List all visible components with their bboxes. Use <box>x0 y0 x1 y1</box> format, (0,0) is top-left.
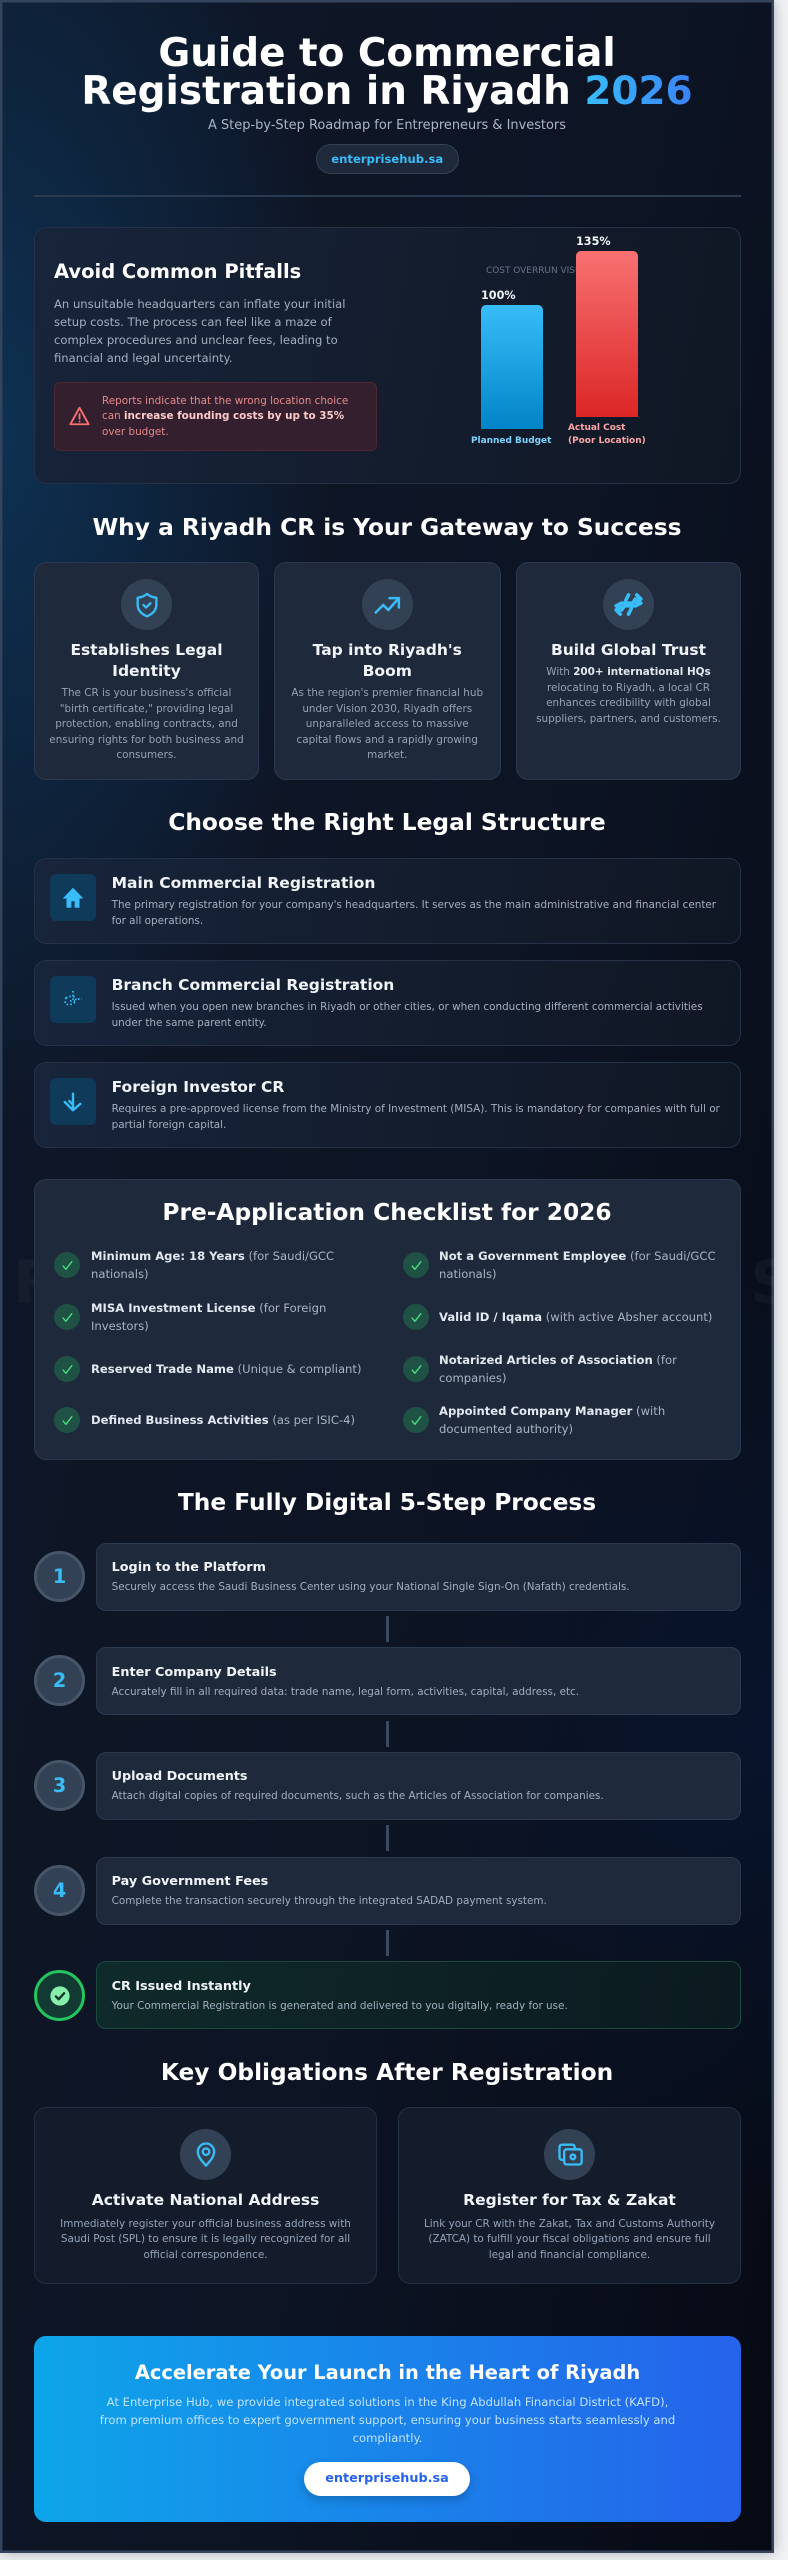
card text: capital flows and a rapidly growing <box>297 734 478 746</box>
item: trade name: Reserved Trade Name (Unique & compliant) <box>91 1362 361 1376</box>
card: national address <box>34 2107 377 2284</box>
card heading: Boom <box>363 662 412 680</box>
card text: As the region's premier financial hub <box>291 687 483 699</box>
row text <box>112 1102 720 1130</box>
card: riyadh boom <box>274 562 500 780</box>
alert text <box>102 394 348 438</box>
bar: planned budget <box>481 305 543 429</box>
item: articles: Notarized Articles of Association (for <box>439 1353 677 1367</box>
card heading <box>312 641 462 680</box>
item: not government employee <box>439 1249 716 1281</box>
card text: legal and financial compliance. <box>489 2248 650 2260</box>
step 5 title: CR Issued Instantly <box>112 1978 251 1994</box>
alert callout <box>54 382 377 451</box>
bar: actual cost <box>576 251 638 417</box>
heading: avoid common pitfalls: Avoid Common Pitfalls <box>54 260 301 283</box>
item: articles: companies) <box>439 1371 506 1385</box>
icon: arrow down <box>50 1078 96 1125</box>
title: Guide to Commercial <box>158 30 616 76</box>
step number 2 <box>34 1655 85 1706</box>
card heading: Establishes Legal <box>70 641 223 659</box>
check: articles <box>403 1356 429 1382</box>
label: actual cost <box>568 423 646 446</box>
step card 5 <box>96 1961 741 2029</box>
item: not government employee: Not a Government Employee (for Saudi/GCC <box>439 1249 716 1263</box>
chart: cost overrun <box>471 235 646 446</box>
step card 3 <box>96 1752 741 1820</box>
card heading: Tap into Riyadh's <box>313 641 462 659</box>
card text: Immediately register your official business address with <box>60 2218 351 2230</box>
chart caption: COST OVERRUN VISUALIZATION <box>486 266 629 276</box>
card text: protection, enabling contracts, and <box>55 718 238 730</box>
pitfalls paragraph: complex procedures and unclear fees, leading to <box>54 333 338 347</box>
check: minimum age <box>54 1252 80 1278</box>
card text: (ZATCA) to fulfill your fiscal obligations and ensure full <box>428 2233 711 2245</box>
pitfalls paragraph: An unsuitable headquarters can inflate your initial <box>54 297 346 311</box>
heading: why riyadh: Why a Riyadh CR is Your Gateway to Success <box>92 514 682 541</box>
heading: process: The Fully Digital 5-Step Process <box>178 1489 596 1516</box>
row title: Foreign Investor CR <box>112 1078 284 1096</box>
cta text: compliantly. <box>353 2431 422 2445</box>
cta button <box>304 2462 470 2496</box>
card text: With 200+ international HQs <box>546 666 711 678</box>
card heading: Identity <box>112 662 181 680</box>
item: articles <box>439 1353 677 1385</box>
cta text: At Enterprise Hub, we provide integrated solutions in the King Abdullah Financial District (KAFD), <box>107 2395 668 2409</box>
step card 1 <box>96 1543 741 1611</box>
icon: shield <box>121 579 172 630</box>
card text: ensuring rights for both business and <box>49 734 244 746</box>
step 5 text: Your Commercial Registration is generated and delivered to you digitally, ready for use. <box>112 2000 568 2012</box>
step number 3: 3 <box>53 1774 66 1797</box>
pitfalls paragraph: financial and legal uncertainty. <box>54 351 233 365</box>
step number 4 <box>34 1865 85 1916</box>
pitfalls paragraph: setup costs. The process can feel like a maze of <box>54 315 332 329</box>
alert text: over budget. <box>102 426 169 438</box>
check: company manager <box>403 1407 429 1433</box>
card text: enhances credibility with global <box>546 697 711 709</box>
website pill: enterprisehub.sa <box>331 152 443 166</box>
step number 4: 4 <box>53 1879 66 1902</box>
step 3 text: Attach digital copies of required documents, such as the Articles of Association for companies. <box>112 1790 604 1802</box>
icon: map pin <box>180 2128 231 2180</box>
row: foreign investor cr <box>34 1062 741 1148</box>
card text <box>291 687 483 761</box>
item: valid id: Valid ID / Iqama (with active Absher account) <box>439 1310 712 1324</box>
panel: avoid common pitfalls <box>34 227 741 484</box>
step 4 text: Complete the transaction securely through the integrated SADAD payment system. <box>112 1895 547 1907</box>
value: 100%: 100% <box>481 289 516 302</box>
check: misa license <box>54 1304 80 1330</box>
step number 1 <box>34 1551 85 1602</box>
cta text <box>100 2395 675 2445</box>
item: misa license: Investors) <box>91 1319 149 1333</box>
step 3 title: Upload Documents <box>112 1769 248 1784</box>
step 1 text: Securely access the Saudi Business Center using your National Single Sign-On (Nafath) credentials. <box>112 1581 630 1593</box>
card text: consumers. <box>116 749 177 761</box>
website pill <box>316 144 459 174</box>
icon: cash stack <box>544 2128 595 2180</box>
check: not government employee <box>403 1252 429 1278</box>
step number 2: 2 <box>53 1669 66 1692</box>
cta heading: Accelerate Your Launch in the Heart of Riyadh <box>135 2361 640 2384</box>
step card 2 <box>96 1647 741 1715</box>
card text: under Vision 2030, Riyadh offers <box>302 702 472 714</box>
item: company manager: documented authority) <box>439 1422 573 1436</box>
item: misa license <box>91 1301 326 1333</box>
card text: Link your CR with the Zakat, Tax and Customs Authority <box>424 2218 715 2230</box>
card text: unparalleled access to massive <box>306 718 469 730</box>
card heading <box>70 641 223 680</box>
check: trade name <box>54 1356 80 1382</box>
card text <box>49 687 244 761</box>
alert text: can increase founding costs by up to 35% <box>102 410 344 422</box>
title <box>81 30 693 114</box>
card text: "birth certificate," providing legal <box>60 702 233 714</box>
card text: market. <box>367 749 407 761</box>
item: minimum age: Minimum Age: 18 Years (for Saudi/GCC <box>91 1249 334 1263</box>
check: valid id <box>403 1304 429 1330</box>
step number 1: 1 <box>53 1565 66 1588</box>
card text <box>60 2218 351 2260</box>
heading: legal structure: Choose the Right Legal Structure <box>168 809 606 836</box>
item: company manager <box>439 1404 665 1436</box>
card: tax and zakat <box>398 2107 741 2284</box>
card heading: Build Global Trust <box>551 641 706 659</box>
cta text: from premium offices to expert government support, ensuring your business starts seamlessly and <box>100 2413 675 2427</box>
panel: checklist <box>34 1179 741 1460</box>
item: minimum age: nationals) <box>91 1267 149 1281</box>
card text: The CR is your business's official <box>62 687 231 699</box>
row text: partial foreign capital. <box>112 1118 226 1130</box>
row text: for all operations. <box>112 914 203 926</box>
item: minimum age <box>91 1249 334 1281</box>
label: actual cost: Actual Cost <box>568 423 625 433</box>
step 4 title: Pay Government Fees <box>112 1874 268 1889</box>
pitfalls paragraph <box>54 297 346 365</box>
item: misa license: MISA Investment License (for Foreign <box>91 1301 326 1315</box>
row text: The primary registration for your company's headquarters. It serves as the main administrative and financial center <box>112 898 716 910</box>
row title: Main Commercial Registration <box>112 874 375 892</box>
label: planned budget: Planned Budget <box>471 436 551 446</box>
step 5 success badge <box>34 1970 85 2021</box>
step 2 title: Enter Company Details <box>112 1664 277 1680</box>
card: legal identity <box>34 562 259 780</box>
card text <box>424 2218 715 2260</box>
item: company manager: Appointed Company Manager (with <box>439 1404 665 1418</box>
cta button: enterprisehub.sa <box>325 2471 449 2486</box>
card text: official correspondence. <box>143 2248 268 2260</box>
alert text: Reports indicate that the wrong location choice <box>102 394 348 406</box>
step 2 text: Accurately fill in all required data: trade name, legal form, activities, capital, address, etc. <box>112 1686 579 1698</box>
row: main commercial registration <box>34 858 741 944</box>
call to action panel <box>34 2336 741 2522</box>
item: business activities: Defined Business Activities (as per ISIC-4) <box>91 1413 355 1427</box>
card text: Saudi Post (SPL) to ensure it is legally recognized for all <box>61 2233 350 2245</box>
check: business activities <box>54 1407 80 1433</box>
item: not government employee: nationals) <box>439 1267 497 1281</box>
heading: key obligations: Key Obligations After Registration <box>161 2059 613 2086</box>
row text: Issued when you open new branches in Riyadh or other cities, or when conducting different commercial activities <box>112 1000 703 1012</box>
heading: checklist: Pre-Application Checklist for 2026 <box>162 1199 612 1226</box>
icon: dashed sparkle <box>50 976 96 1023</box>
row text <box>112 1000 703 1028</box>
card text: suppliers, partners, and customers. <box>536 712 721 724</box>
row title: Branch Commercial Registration <box>112 976 394 994</box>
icon: home <box>50 874 96 921</box>
row text <box>112 898 716 926</box>
subtitle: A Step-by-Step Roadmap for Entrepreneurs & Investors <box>208 118 566 133</box>
card text <box>536 666 721 724</box>
row text: Requires a pre-approved license from the Ministry of Investment (MISA). This is mandatory for companies with full or <box>112 1102 720 1114</box>
value: 135%: 135% <box>576 235 611 248</box>
card heading: Activate National Address <box>92 2191 319 2209</box>
icon: warning triangle <box>69 406 90 426</box>
icon: trending up <box>362 579 412 630</box>
label: actual cost: (Poor Location) <box>568 436 646 446</box>
title: Registration in Riyadh 2026 <box>81 69 693 114</box>
step number 3 <box>34 1760 85 1811</box>
step card 4 <box>96 1856 741 1924</box>
step 1 title: Login to the Platform <box>112 1560 266 1575</box>
icon: exchange arrows <box>603 579 654 630</box>
card heading: Register for Tax & Zakat <box>463 2191 676 2209</box>
row text: under the same parent entity. <box>112 1016 267 1028</box>
row: branch commercial registration <box>34 960 741 1046</box>
card text: relocating to Riyadh, a local CR <box>547 682 710 694</box>
card: global trust <box>516 562 741 780</box>
